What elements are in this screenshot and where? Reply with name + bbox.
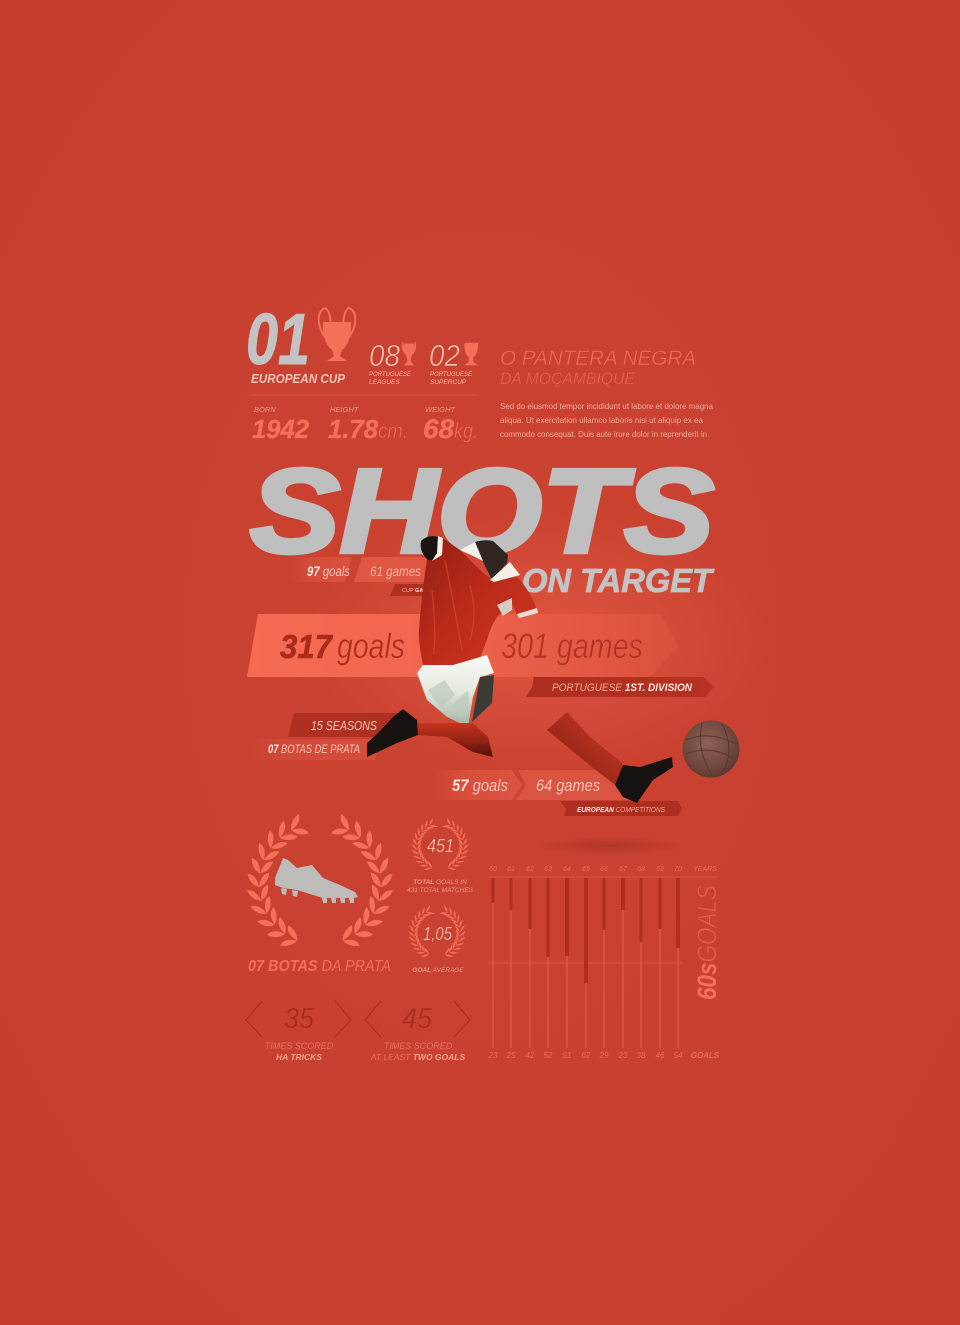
year labels: 67	[619, 866, 628, 873]
year labels: 65	[582, 866, 590, 873]
year labels: 61	[507, 866, 515, 873]
chevron left	[365, 1001, 381, 1037]
European competitions stat	[432, 770, 682, 816]
right branch	[442, 818, 469, 872]
chevron left	[246, 1001, 262, 1037]
goal labels: 51	[563, 1051, 571, 1060]
goal labels: 46	[656, 1051, 665, 1060]
goal labels: 42	[526, 1051, 535, 1060]
year labels: YEARS	[693, 866, 717, 873]
height value: 1.78	[328, 414, 379, 444]
chevron right	[335, 1001, 351, 1037]
bio title line 1: O PANTERA NEGRA	[500, 346, 696, 370]
born value: 1942	[252, 414, 310, 444]
caption: total goals line 1: TOTAL GOALS IN	[413, 879, 467, 886]
icon: big trophy	[319, 308, 355, 361]
goal labels: 52	[544, 1051, 553, 1060]
goal labels: 23	[488, 1051, 498, 1060]
year labels: 66	[600, 866, 608, 873]
big laurel wreath	[247, 814, 393, 951]
biography	[500, 346, 713, 439]
goal labels	[488, 1051, 720, 1060]
competitions tag	[560, 801, 682, 816]
band right	[354, 557, 430, 582]
collar right	[490, 562, 520, 582]
left leg	[418, 723, 493, 757]
weight label: WEIGHT	[425, 405, 456, 414]
player figure	[367, 536, 673, 803]
tag label: CUP GAMES	[402, 588, 436, 594]
value: 45	[402, 1003, 433, 1035]
caption: total goals line 2: 431 TOTAL MATCHES	[407, 887, 474, 894]
year labels: 70	[674, 866, 682, 873]
shorts	[417, 655, 494, 727]
year labels: 64	[563, 866, 571, 873]
banner shape	[247, 614, 679, 677]
caption line 2: AT LEAST TWO GOALS	[370, 1052, 465, 1062]
European Cup count: 01	[246, 300, 310, 380]
year labels: 62	[526, 866, 534, 873]
year labels: 68	[637, 866, 645, 873]
label: Portuguese leagues: PORTUGUESE	[369, 371, 412, 378]
right branch	[439, 905, 466, 959]
caption line 1: TIMES SCORED	[384, 1041, 453, 1051]
cup games stat	[290, 557, 450, 596]
label: Portuguese supercup: PORTUGUESE	[430, 371, 473, 378]
goal labels: 25	[506, 1051, 516, 1060]
year labels: 60	[489, 866, 497, 873]
cut-off neck	[421, 536, 441, 560]
chevron right	[454, 1001, 470, 1037]
right branch	[331, 814, 393, 951]
small wreath: 451	[411, 818, 469, 872]
label: leagues: LEAGUES	[369, 379, 400, 386]
year labels: 63	[544, 866, 552, 873]
jersey folds	[432, 560, 474, 655]
year labels	[489, 866, 717, 873]
cup games tag	[390, 584, 450, 596]
header: trophies	[246, 300, 478, 386]
league main banner	[247, 614, 714, 697]
born label: BORN	[254, 405, 276, 414]
badge	[497, 598, 512, 616]
right boot	[615, 757, 673, 803]
Portuguese supercup count: 02	[429, 338, 460, 373]
height unit: cm.	[378, 420, 408, 443]
seasons band	[288, 713, 400, 737]
label: 07 botas da prata: 07 BOTAS DA PRATA	[248, 958, 391, 975]
317 value: 317	[280, 628, 334, 665]
label: European Cup: EUROPEAN CUP	[251, 372, 346, 386]
caption line 1: TIMES SCORED	[265, 1041, 334, 1051]
icon: small trophy supercup	[465, 343, 478, 365]
bar chart: 60s goals	[488, 866, 722, 1060]
goal labels: 29	[599, 1051, 609, 1060]
goals word: goals	[337, 627, 405, 666]
collar left	[460, 542, 483, 561]
hat tricks stat	[246, 1001, 351, 1062]
caption: goal average: GOAL AVERAGE	[412, 967, 464, 974]
goal labels: 54	[674, 1051, 683, 1060]
band right	[516, 770, 640, 800]
label: supercup: SUPERCUP	[430, 379, 467, 386]
seasons label: 15 SEASONS	[311, 718, 377, 733]
right sock	[547, 712, 623, 785]
two goals stat	[365, 1001, 470, 1062]
shorts shadow	[472, 675, 494, 722]
icon: small trophy leagues	[402, 342, 416, 365]
goal labels: 38	[637, 1051, 646, 1060]
games value: 64 games	[536, 776, 600, 795]
jersey	[419, 537, 537, 665]
left branch	[247, 814, 309, 951]
seasons and botas	[248, 713, 400, 760]
football	[682, 720, 740, 778]
icon: silver boot	[275, 858, 358, 903]
value: 1,05: 1,05	[423, 924, 453, 944]
caption line 2: HA TRICKS	[276, 1052, 322, 1062]
301 games: 301 games	[501, 627, 643, 666]
band	[290, 557, 352, 582]
bio title line 2: DA MOÇAMBIQUE	[500, 370, 636, 388]
tag label: PORTUGUESE 1ST. DIVISION	[552, 682, 693, 694]
band left	[432, 770, 522, 800]
value: 35	[284, 1003, 315, 1035]
shadow under player	[535, 837, 685, 855]
jersey back hole	[475, 540, 508, 580]
bio line 2: aliqua. Ut exercitation ullamco laboris nisi ut aliquip ex ea	[500, 415, 703, 425]
shorts facets	[428, 680, 470, 718]
personal stats	[252, 405, 478, 444]
year labels: 69	[656, 866, 664, 873]
sleeve cuff	[517, 608, 538, 618]
goal labels: 62	[582, 1051, 591, 1060]
left branch	[408, 905, 435, 959]
goals value: 97 goals	[307, 564, 350, 579]
goal labels: 23	[618, 1051, 628, 1060]
rotated title: 60sGOALS	[692, 885, 722, 1000]
weight unit: kg.	[454, 420, 478, 443]
light stems	[493, 878, 678, 1048]
centre glow	[310, 510, 770, 770]
games value: 61 games	[370, 564, 421, 579]
left branch	[411, 818, 438, 872]
Portuguese leagues count: 08	[369, 338, 401, 373]
Portuguese division tag	[526, 677, 714, 697]
neck trim	[432, 536, 443, 561]
weight value: 68	[423, 414, 454, 444]
goals value: 57 goals	[452, 776, 508, 795]
goal labels: GOALS	[691, 1051, 720, 1060]
small wreath: 1,05	[408, 905, 466, 959]
dark goal bars	[492, 878, 680, 983]
bio line 3: commodo consequat. Duis aute irure dolor in reprenderit in	[500, 429, 707, 439]
subtitle: ON TARGET: ON TARGET	[522, 562, 715, 599]
title: SHOTS: SHOTS	[250, 445, 714, 578]
height label: HEIGHT	[330, 405, 360, 414]
bio line 1: Sed do eiusmod tempor incididunt ut labore et dolore magna	[500, 401, 713, 411]
botas label: 07 BOTAS DE PRATA	[268, 744, 360, 756]
left boot	[367, 709, 418, 757]
botas band	[248, 739, 380, 760]
tag label: EUROPEAN COMPETITIONS	[577, 805, 665, 814]
value: 451: 451	[427, 836, 454, 856]
